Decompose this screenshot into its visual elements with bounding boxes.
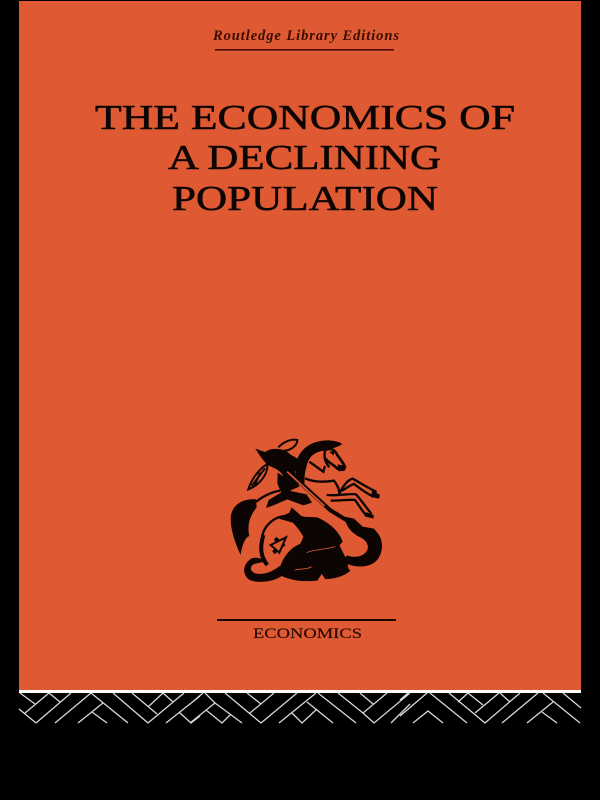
white divider — [19, 690, 581, 693]
title: THE ECONOMICS OF — [95, 98, 515, 137]
horse hind leg — [261, 535, 283, 565]
horse muzzle — [329, 451, 346, 471]
rider plume — [248, 464, 267, 489]
pattern: geometric key band — [19, 693, 581, 723]
horse tail — [231, 499, 257, 555]
dragon foot — [323, 568, 351, 579]
subject label: ECONOMICS — [253, 626, 362, 642]
series name: Routledge Library Editions — [212, 28, 399, 44]
series rule — [215, 49, 394, 51]
dragon body — [244, 529, 349, 582]
horse body outline — [253, 491, 310, 543]
dragon tail — [343, 517, 382, 566]
horse head — [325, 449, 345, 470]
rider leg — [266, 473, 312, 508]
icon: Saint George and the dragon emblem — [231, 440, 382, 582]
subject rule — [217, 619, 396, 621]
dragon wing — [271, 537, 286, 553]
horse chest outline — [305, 451, 339, 494]
horse neck and mane — [296, 440, 342, 483]
lance — [285, 469, 347, 521]
helmet feather — [278, 440, 297, 451]
title: POPULATION — [172, 179, 438, 218]
horse front legs — [327, 479, 377, 516]
title — [95, 98, 515, 218]
rider cloak — [255, 449, 301, 491]
horse hooves — [365, 490, 380, 519]
dragon leg gap — [295, 547, 335, 570]
title: A DECLINING — [168, 138, 441, 177]
dragon neck — [278, 507, 343, 549]
